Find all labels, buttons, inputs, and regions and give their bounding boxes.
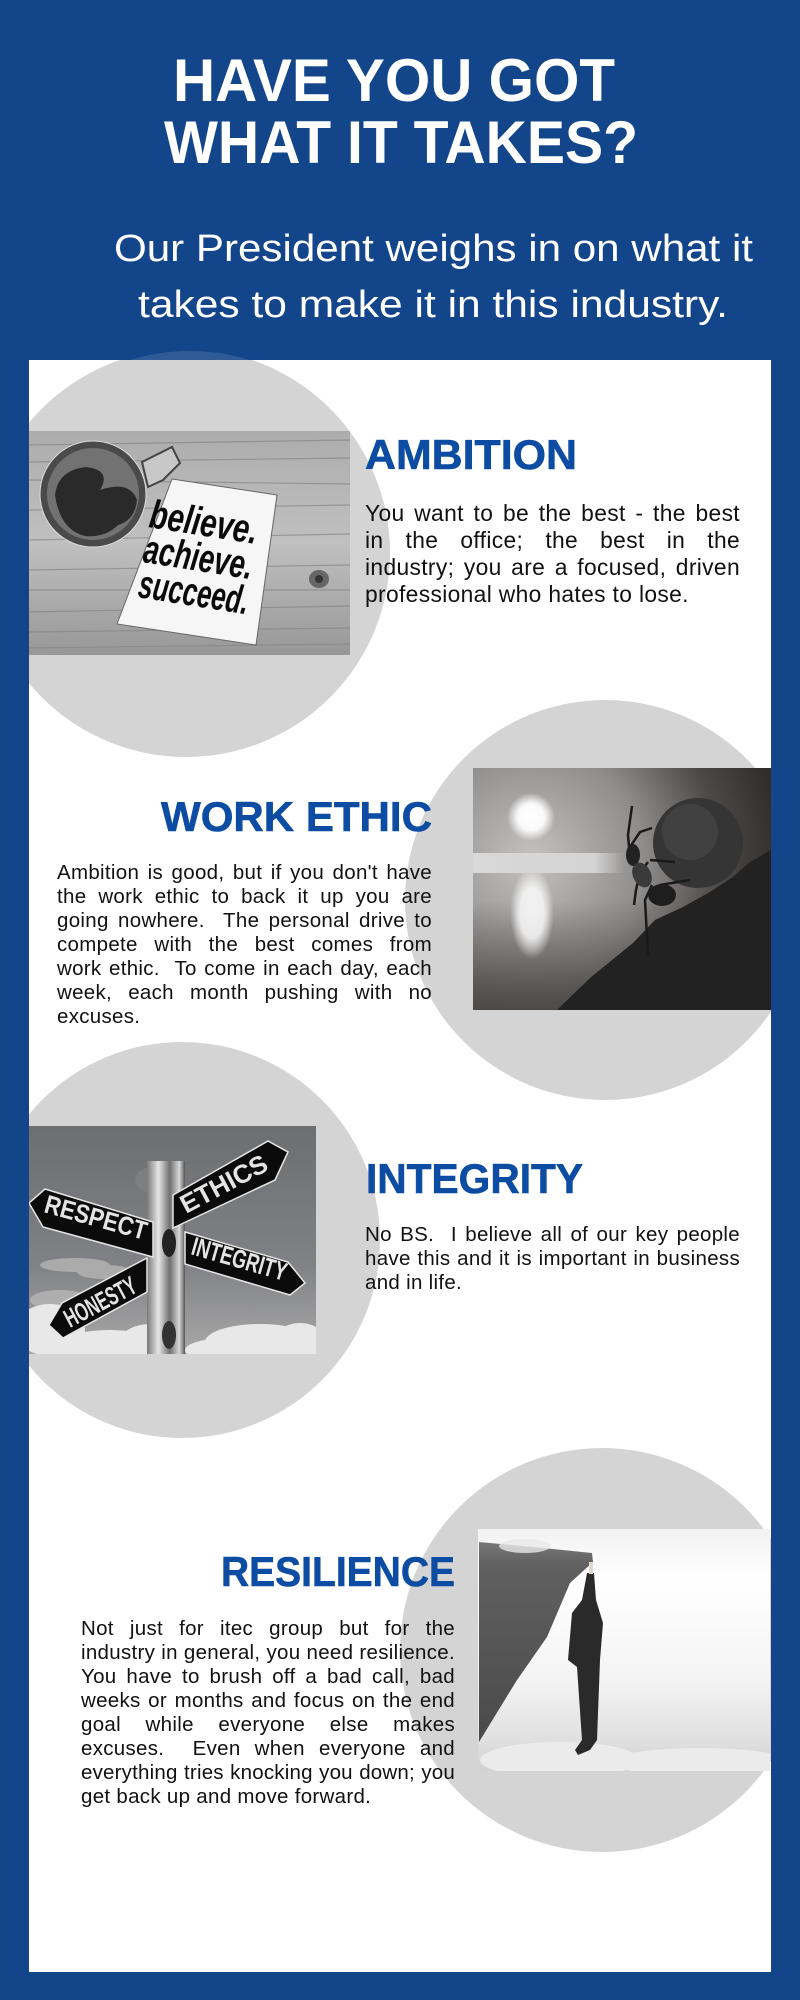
text: work ethic body: going nowhere. The personal drive to [57,909,432,932]
text: work ethic body: the work ethic to back it up you are [57,885,432,908]
text: resilience body [81,1617,455,1808]
text: work ethic body: compete with the best comes from [57,933,432,956]
heading: resilience: RESILIENCE [221,1548,455,1595]
image: coffee and believe achieve succeed note: achieve. [141,527,256,588]
text: resilience body: excuses. Even when everyone and [81,1737,455,1760]
image: ethics signpost: RESPECT [41,1189,151,1246]
text: work ethic body: Ambition is good, but if you don't have [57,861,432,884]
subtitle: Our President weighs in on what it [114,228,753,270]
text: resilience body: You have to brush off a bad call, bad [81,1665,455,1688]
text: resilience body: goal while everyone else makes [81,1713,455,1736]
image: ethics signpost: INTEGRITY [188,1231,291,1287]
text: ambition body [365,500,740,607]
image: coffee and believe achieve succeed note: believe. [147,492,261,553]
text: resilience body: Not just for itec group but for the [81,1617,455,1640]
panel: white content area [29,360,771,1972]
circle backdrops [0,349,800,1852]
text: integrity body: No BS. I believe all of our key people [365,1223,740,1246]
text: ambition body: in the office; the best in the [365,527,740,553]
text: resilience body: everything tries knocking you down; you [81,1761,455,1784]
text: work ethic body [57,861,432,1028]
text: work ethic body: excuses. [57,1005,140,1028]
heading: ambition: AMBITION [365,431,577,478]
text: resilience body: weeks or months and focus on the end [81,1689,455,1712]
title: HAVE YOU GOT [173,47,615,114]
text: integrity body [365,1223,740,1294]
text: ambition body: professional who hates to lose. [365,581,689,607]
text: work ethic body: work ethic. To come in each day, each [57,957,432,980]
text: work ethic body: week, each month pushing with no [57,981,432,1004]
text: integrity body: have this and it is important in business [365,1247,740,1270]
subtitle: takes to make it in this industry. [138,284,728,326]
image: ant pushing a ball uphill [473,768,771,1010]
subtitle [114,228,753,326]
heading: integrity: INTEGRITY [366,1155,583,1202]
title [164,47,638,176]
image: businessman hanging from a cliff [478,1529,790,1778]
image: ethics signpost: ETHICS [175,1148,273,1219]
image: coffee and believe achieve succeed note [29,431,350,655]
heading: work ethic: WORK ETHIC [161,793,432,840]
image: ethics signpost [29,1126,316,1354]
title: WHAT IT TAKES? [164,109,638,176]
text: integrity body: and in life. [365,1271,462,1294]
text: ambition body: You want to be the best - the best [365,500,740,526]
image: coffee and believe achieve succeed note: succeed. [136,562,252,623]
text: ambition body: industry; you are a focused, driven [365,554,740,580]
text: resilience body: industry in general, you need resilience. [81,1641,455,1664]
image: ethics signpost: HONESTY [59,1270,142,1333]
text: resilience body: get back up and move forward. [81,1785,371,1808]
circle cap over header [130,351,250,360]
